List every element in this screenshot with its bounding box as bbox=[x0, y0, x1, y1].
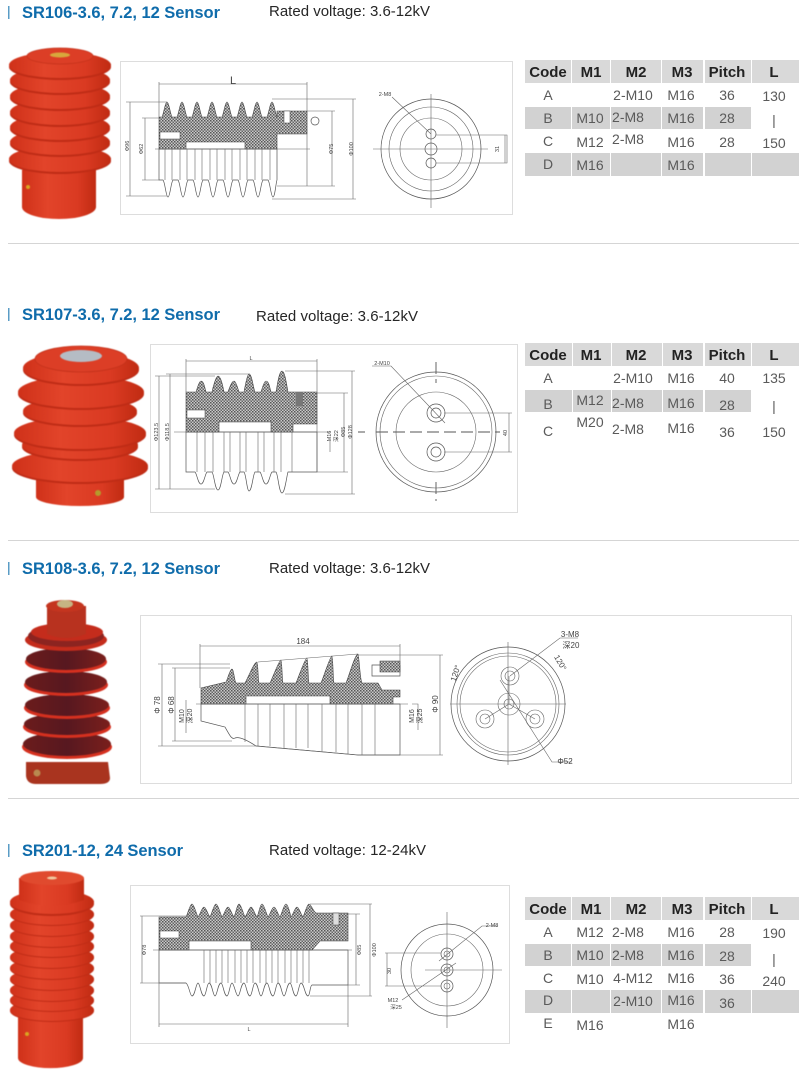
table header: M3 bbox=[672, 901, 692, 918]
dimensions: M16 bbox=[327, 431, 333, 441]
end view bbox=[449, 630, 580, 766]
end view: 120° bbox=[552, 653, 568, 672]
side section view bbox=[153, 904, 352, 996]
table rows: M12 bbox=[576, 134, 604, 150]
table rows: M12 bbox=[576, 392, 604, 408]
table header: Pitch bbox=[709, 347, 745, 364]
table rows: C bbox=[543, 423, 553, 439]
table rows: 2-M8 bbox=[612, 109, 644, 125]
end view bbox=[358, 361, 512, 501]
table header: M2 bbox=[626, 347, 646, 364]
dimensions: 深25 bbox=[415, 709, 424, 723]
table rows: C bbox=[543, 133, 553, 149]
table header: M1 bbox=[581, 64, 601, 81]
table header bbox=[525, 343, 799, 366]
dimensions: L bbox=[249, 356, 253, 362]
table rows: 36 bbox=[719, 995, 735, 1011]
end view bbox=[385, 912, 502, 1028]
table header: Pitch bbox=[709, 64, 745, 81]
table rows: B bbox=[543, 396, 553, 412]
heading: SR201: SR201-12, 24 Sensor bbox=[22, 842, 184, 860]
section: SR106 bbox=[8, 3, 799, 219]
table rows: M16 bbox=[667, 157, 695, 173]
table header: M1 bbox=[581, 347, 601, 364]
photo: SR106 sensor bbox=[9, 48, 111, 219]
table rows: M16 bbox=[667, 420, 695, 436]
dimensions: M16 bbox=[409, 709, 416, 723]
table rows: M16 bbox=[667, 370, 695, 386]
table rows: M16 bbox=[667, 395, 695, 411]
dimensions: Φ100 bbox=[372, 943, 378, 957]
heading: SR108: SR108-3.6, 7.2, 12 Sensor bbox=[22, 560, 221, 578]
end view: 120° bbox=[449, 664, 462, 682]
table header bbox=[525, 60, 799, 83]
table header: M1 bbox=[581, 901, 601, 918]
table header bbox=[525, 897, 799, 920]
table rows: M16 bbox=[667, 134, 695, 150]
dimensions: Φ100 bbox=[349, 142, 355, 156]
dimensions: Φ 68 bbox=[167, 696, 176, 714]
table header: M2 bbox=[626, 64, 646, 81]
table rows: A bbox=[543, 370, 553, 386]
dimensions bbox=[153, 637, 443, 755]
engineering drawing: SR201 bbox=[130, 886, 510, 1044]
table header: L bbox=[769, 64, 779, 81]
table header: M3 bbox=[672, 64, 692, 81]
dimensions bbox=[140, 904, 378, 1033]
dimensions: Φ96 bbox=[125, 141, 131, 151]
table rows: 28 bbox=[719, 134, 735, 150]
end view: 30 bbox=[387, 968, 393, 974]
table rows: 36 bbox=[719, 87, 735, 103]
end view: 2-M8 bbox=[379, 92, 391, 98]
dimensions: Φ78 bbox=[142, 945, 148, 955]
table rows: | bbox=[772, 112, 776, 128]
end view bbox=[373, 92, 507, 208]
table rows: 2-M8 bbox=[612, 131, 644, 147]
dimensions: 184 bbox=[296, 637, 310, 646]
engineering drawing: SR107 bbox=[150, 344, 518, 512]
section: SR107 bbox=[8, 306, 799, 512]
table rows: 36 bbox=[719, 424, 735, 440]
table rows: M16 bbox=[576, 1017, 604, 1033]
table header: M2 bbox=[626, 901, 646, 918]
table rows: | bbox=[772, 951, 776, 967]
dimensions: Φ 90 bbox=[431, 695, 440, 713]
photo: SR201 sensor bbox=[10, 871, 94, 1068]
dimensions: Φ85 bbox=[357, 945, 363, 955]
table rows: M12 bbox=[576, 924, 604, 940]
table header: Code bbox=[529, 347, 567, 364]
table rows: D bbox=[543, 156, 553, 172]
side section view bbox=[196, 654, 408, 755]
table rows: M16 bbox=[667, 992, 695, 1008]
spec table: SR107 bbox=[525, 343, 799, 440]
spec table: SR201 bbox=[525, 897, 799, 1033]
table header: M3 bbox=[672, 347, 692, 364]
dimensions bbox=[154, 356, 355, 494]
end view: 40 bbox=[503, 430, 509, 436]
dimensions: L bbox=[230, 75, 236, 87]
dimensions: Φ128 bbox=[348, 425, 354, 439]
rated voltage: Rated voltage: 3.6-12kV bbox=[269, 560, 430, 577]
table rows: M16 bbox=[667, 924, 695, 940]
table rows: C bbox=[543, 970, 553, 986]
dimensions: Φ62 bbox=[139, 144, 145, 154]
table rows: B bbox=[543, 947, 553, 963]
end view: 2-M10 bbox=[374, 361, 390, 367]
table rows: E bbox=[543, 1015, 553, 1031]
end view: 深25 bbox=[390, 1003, 402, 1011]
table header: Pitch bbox=[709, 901, 745, 918]
table rows: M20 bbox=[576, 414, 604, 430]
end view: 3-M8 bbox=[561, 630, 580, 639]
side section view bbox=[174, 371, 330, 493]
table rows: 240 bbox=[762, 973, 786, 989]
table header: Code bbox=[529, 64, 567, 81]
dimensions: Φ118.5 bbox=[165, 423, 171, 441]
table header: Code bbox=[529, 901, 567, 918]
table rows: M16 bbox=[576, 157, 604, 173]
spec table: SR106 bbox=[525, 60, 799, 176]
end view: 深20 bbox=[563, 641, 580, 650]
table rows: M16 bbox=[667, 947, 695, 963]
table rows: 2-M8 bbox=[612, 395, 644, 411]
rated voltage: Rated voltage: 12-24kV bbox=[269, 842, 426, 859]
table rows: B bbox=[543, 110, 553, 126]
table rows: 130 bbox=[762, 88, 786, 104]
end view: Φ52 bbox=[557, 757, 573, 766]
table rows: 28 bbox=[719, 948, 735, 964]
table rows: | bbox=[772, 398, 776, 414]
table header: L bbox=[769, 347, 779, 364]
table rows bbox=[525, 924, 799, 1033]
table rows: 2-M8 bbox=[612, 421, 644, 437]
table rows: M16 bbox=[667, 87, 695, 103]
table rows: 28 bbox=[719, 110, 735, 126]
dimensions: Φ 78 bbox=[153, 696, 162, 714]
table rows: 40 bbox=[719, 370, 735, 386]
table rows: A bbox=[543, 924, 553, 940]
table rows: D bbox=[543, 992, 553, 1008]
table rows: 135 bbox=[762, 370, 786, 386]
table rows: 2-M10 bbox=[613, 87, 653, 103]
table rows: 2-M8 bbox=[612, 924, 644, 940]
dimensions: L bbox=[247, 1027, 251, 1033]
table rows: 150 bbox=[762, 424, 786, 440]
table rows bbox=[525, 87, 799, 176]
heading: SR106: SR106-3.6, 7.2, 12 Sensor bbox=[22, 4, 221, 22]
engineering drawing: SR108 bbox=[140, 616, 792, 784]
table rows: 190 bbox=[762, 925, 786, 941]
table rows: M10 bbox=[576, 947, 604, 963]
table rows: 2-M10 bbox=[613, 370, 653, 386]
dimensions: 深22 bbox=[332, 430, 340, 442]
table rows: M16 bbox=[667, 110, 695, 126]
engineering drawing: SR106 bbox=[120, 62, 512, 214]
table rows: M10 bbox=[576, 971, 604, 987]
table rows: 2-M8 bbox=[612, 947, 644, 963]
end view: 2-M8 bbox=[486, 923, 498, 929]
table rows: M16 bbox=[667, 970, 695, 986]
heading: SR107: SR107-3.6, 7.2, 12 Sensor bbox=[22, 306, 221, 324]
end view: M12 bbox=[388, 998, 398, 1004]
section: SR108 bbox=[8, 560, 792, 784]
table rows: 150 bbox=[762, 135, 786, 151]
table rows: 2-M10 bbox=[613, 993, 653, 1009]
table rows bbox=[525, 370, 786, 440]
table rows: M16 bbox=[667, 1016, 695, 1032]
table rows: M10 bbox=[576, 110, 604, 126]
table rows: A bbox=[543, 87, 553, 103]
rated voltage: Rated voltage: 3.6-12kV bbox=[256, 308, 418, 325]
dimensions bbox=[125, 75, 356, 199]
dimensions: Φ85 bbox=[341, 427, 347, 437]
table header: L bbox=[769, 901, 779, 918]
table rows: 36 bbox=[719, 971, 735, 987]
table rows: 28 bbox=[719, 924, 735, 940]
side section view bbox=[155, 102, 319, 197]
table rows: 28 bbox=[719, 397, 735, 413]
photo: SR108 sensor bbox=[22, 600, 112, 784]
dimensions: Φ75 bbox=[329, 144, 335, 154]
dimensions: M10 bbox=[179, 709, 186, 723]
end view: 31 bbox=[495, 146, 501, 152]
rated voltage: Rated voltage: 3.6-12kV bbox=[269, 3, 430, 20]
table rows: 4-M12 bbox=[613, 970, 653, 986]
photo: SR107 sensor bbox=[12, 346, 148, 506]
dimensions: Φ123.5 bbox=[154, 423, 160, 441]
section: SR201 bbox=[8, 842, 799, 1068]
dimensions: 深20 bbox=[185, 709, 194, 723]
